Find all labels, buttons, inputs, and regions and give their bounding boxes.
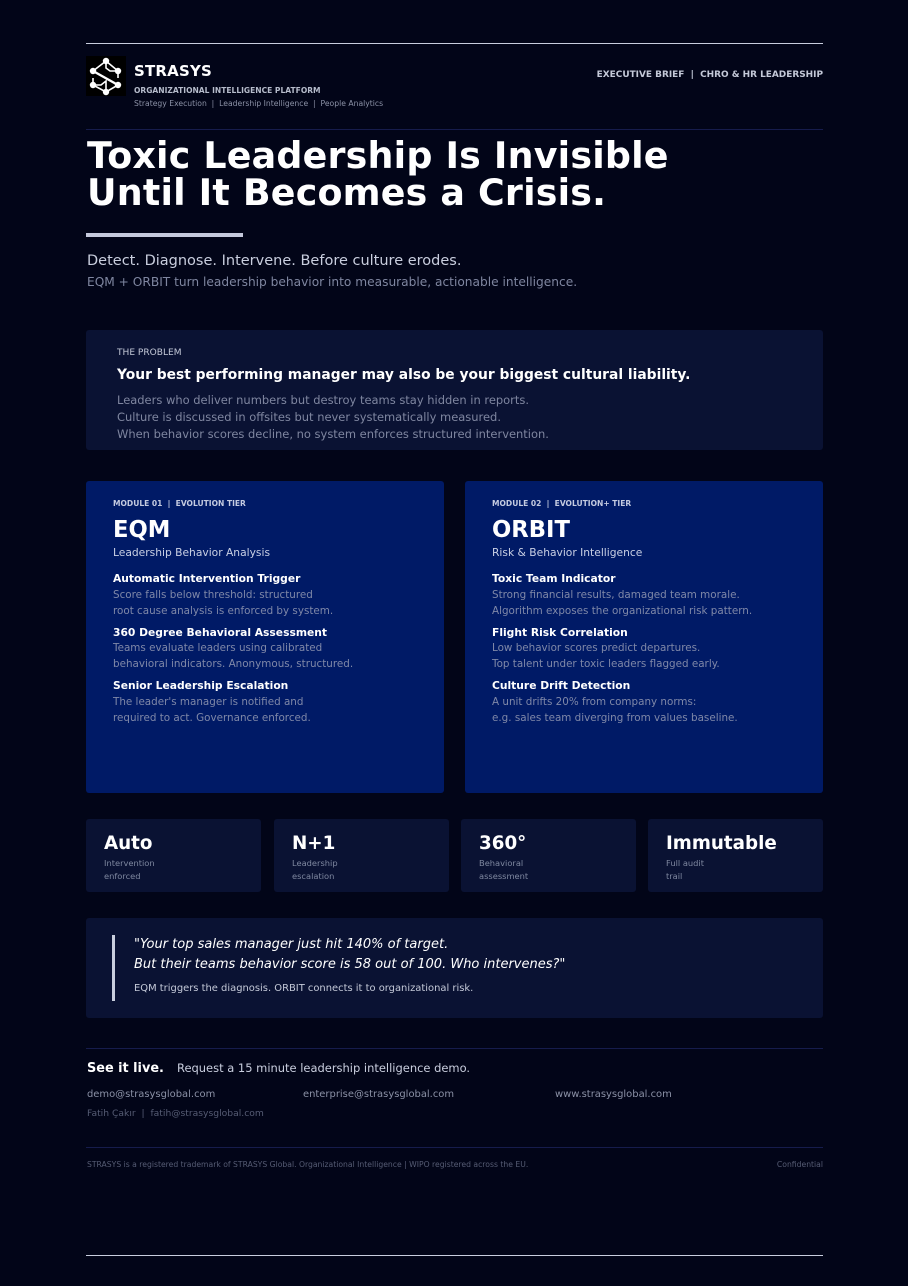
feature text: Algorithm exposes the organizational risk pattern.	[492, 604, 752, 616]
stat label: Intervention	[104, 858, 155, 868]
feature text: Low behavior scores predict departures.	[492, 642, 700, 654]
problem details	[117, 393, 549, 441]
header: brand	[86, 56, 383, 108]
feature heading: Automatic Intervention Trigger	[113, 572, 300, 585]
stat label: enforced	[104, 871, 141, 881]
brand descriptors: Strategy Execution | Leadership Intelligence | People Analytics	[134, 99, 383, 108]
panel: module EQM	[86, 481, 444, 793]
stat: auto	[86, 819, 261, 892]
feature text: Score falls below threshold: structured	[113, 589, 313, 601]
stat value: Auto	[104, 833, 152, 854]
stat label: trail	[666, 871, 682, 881]
stat: N+1	[274, 819, 449, 892]
brand tagline: ORGANIZATIONAL INTELLIGENCE PLATFORM	[134, 86, 321, 95]
feature text: The leader's manager is notified and	[113, 696, 303, 708]
contact: website: www.strasysglobal.com	[555, 1089, 672, 1100]
feature text: Strong financial results, damaged team morale.	[492, 589, 740, 601]
title: Until It Becomes a Crisis.	[87, 171, 606, 214]
panel: quote	[86, 918, 823, 1018]
stat value: N+1	[292, 833, 335, 854]
title accent bar	[86, 233, 243, 237]
stat value: 360°	[479, 833, 526, 854]
call to action text: Request a 15 minute leadership intelligence demo.	[177, 1061, 470, 1075]
feature text: root cause analysis is enforced by system.	[113, 604, 333, 616]
contact: person: Fatih Çakır | fatih@strasysglobal.com	[87, 1108, 264, 1119]
problem details: Leaders who deliver numbers but destroy teams stay hidden in reports.	[117, 393, 529, 407]
feature text	[112, 642, 353, 670]
quote text	[134, 937, 565, 972]
feature text	[492, 696, 738, 724]
contact: enterprise email: enterprise@strasysglobal.com	[303, 1089, 454, 1100]
module tag: MODULE 01 | EVOLUTION TIER	[113, 499, 246, 508]
feature text: Top talent under toxic leaders flagged early.	[492, 658, 720, 670]
module name: EQM	[113, 517, 170, 543]
feature heading: Culture Drift Detection	[492, 679, 630, 692]
panel: module ORBIT	[465, 481, 823, 793]
header: document label: EXECUTIVE BRIEF | CHRO & HR LEADERSHIP	[597, 70, 823, 80]
problem details: When behavior scores decline, no system enforces structured intervention.	[117, 427, 549, 441]
feature text	[492, 642, 720, 670]
icon: strasys logo	[86, 56, 126, 96]
module name: ORBIT	[492, 517, 570, 543]
legal footer: STRASYS is a registered trademark of STRASYS Global. Organizational Intelligence | WIPO registered across the EU.	[87, 1160, 528, 1169]
feature text: e.g. sales team diverging from values baseline.	[492, 712, 738, 724]
feature text	[112, 696, 311, 724]
stat label	[666, 858, 704, 881]
module tag: MODULE 02 | EVOLUTION+ TIER	[492, 499, 631, 508]
feature heading: Senior Leadership Escalation	[113, 679, 288, 692]
stat: 360	[461, 819, 636, 892]
quote text: But their teams behavior score is 58 out of 100. Who intervenes?"	[134, 957, 565, 972]
stat label	[479, 858, 528, 881]
stat label: Full audit	[666, 858, 704, 868]
stat label: Leadership	[292, 858, 338, 868]
module subtitle: Leadership Behavior Analysis	[113, 546, 270, 559]
top rule	[86, 43, 823, 44]
feature text: behavioral indicators. Anonymous, structured.	[113, 658, 353, 670]
stat label: escalation	[292, 871, 334, 881]
stat label: Behavioral	[479, 858, 523, 868]
problem label: THE PROBLEM	[117, 348, 182, 358]
feature text: Teams evaluate leaders using calibrated	[113, 642, 322, 654]
call to action: See it live.	[87, 1061, 164, 1076]
title	[87, 134, 669, 214]
problem details: Culture is discussed in offsites but never systematically measured.	[117, 410, 501, 424]
stat value: Immutable	[666, 833, 777, 854]
feature text	[492, 589, 752, 616]
brand name: STRASYS	[134, 62, 212, 80]
feature heading: 360 Degree Behavioral Assessment	[113, 626, 327, 639]
confidentiality note: Confidential	[777, 1160, 823, 1169]
feature heading: Flight Risk Correlation	[492, 626, 628, 639]
contact: demo email: demo@strasysglobal.com	[87, 1089, 215, 1100]
problem headline: Your best performing manager may also be your biggest cultural liability.	[117, 367, 690, 383]
stat: immutable	[648, 819, 823, 892]
subtitle detail: EQM + ORBIT turn leadership behavior into measurable, actionable intelligence.	[87, 275, 577, 289]
quote note: EQM triggers the diagnosis. ORBIT connects it to organizational risk.	[134, 983, 473, 994]
feature text: required to act. Governance enforced.	[113, 712, 311, 724]
feature text: A unit drifts 20% from company norms:	[492, 696, 696, 708]
title: Toxic Leadership Is Invisible	[87, 134, 669, 177]
module subtitle: Risk & Behavior Intelligence	[492, 546, 642, 559]
panel: the problem	[86, 330, 823, 450]
stat label	[104, 858, 155, 881]
quote bar	[112, 935, 115, 1001]
feature heading: Toxic Team Indicator	[492, 572, 616, 585]
stat label	[292, 858, 338, 881]
subtitle: Detect. Diagnose. Intervene. Before culture erodes.	[87, 253, 461, 269]
quote text: "Your top sales manager just hit 140% of target.	[134, 937, 448, 952]
feature text	[113, 589, 333, 616]
stat label: assessment	[479, 871, 528, 881]
